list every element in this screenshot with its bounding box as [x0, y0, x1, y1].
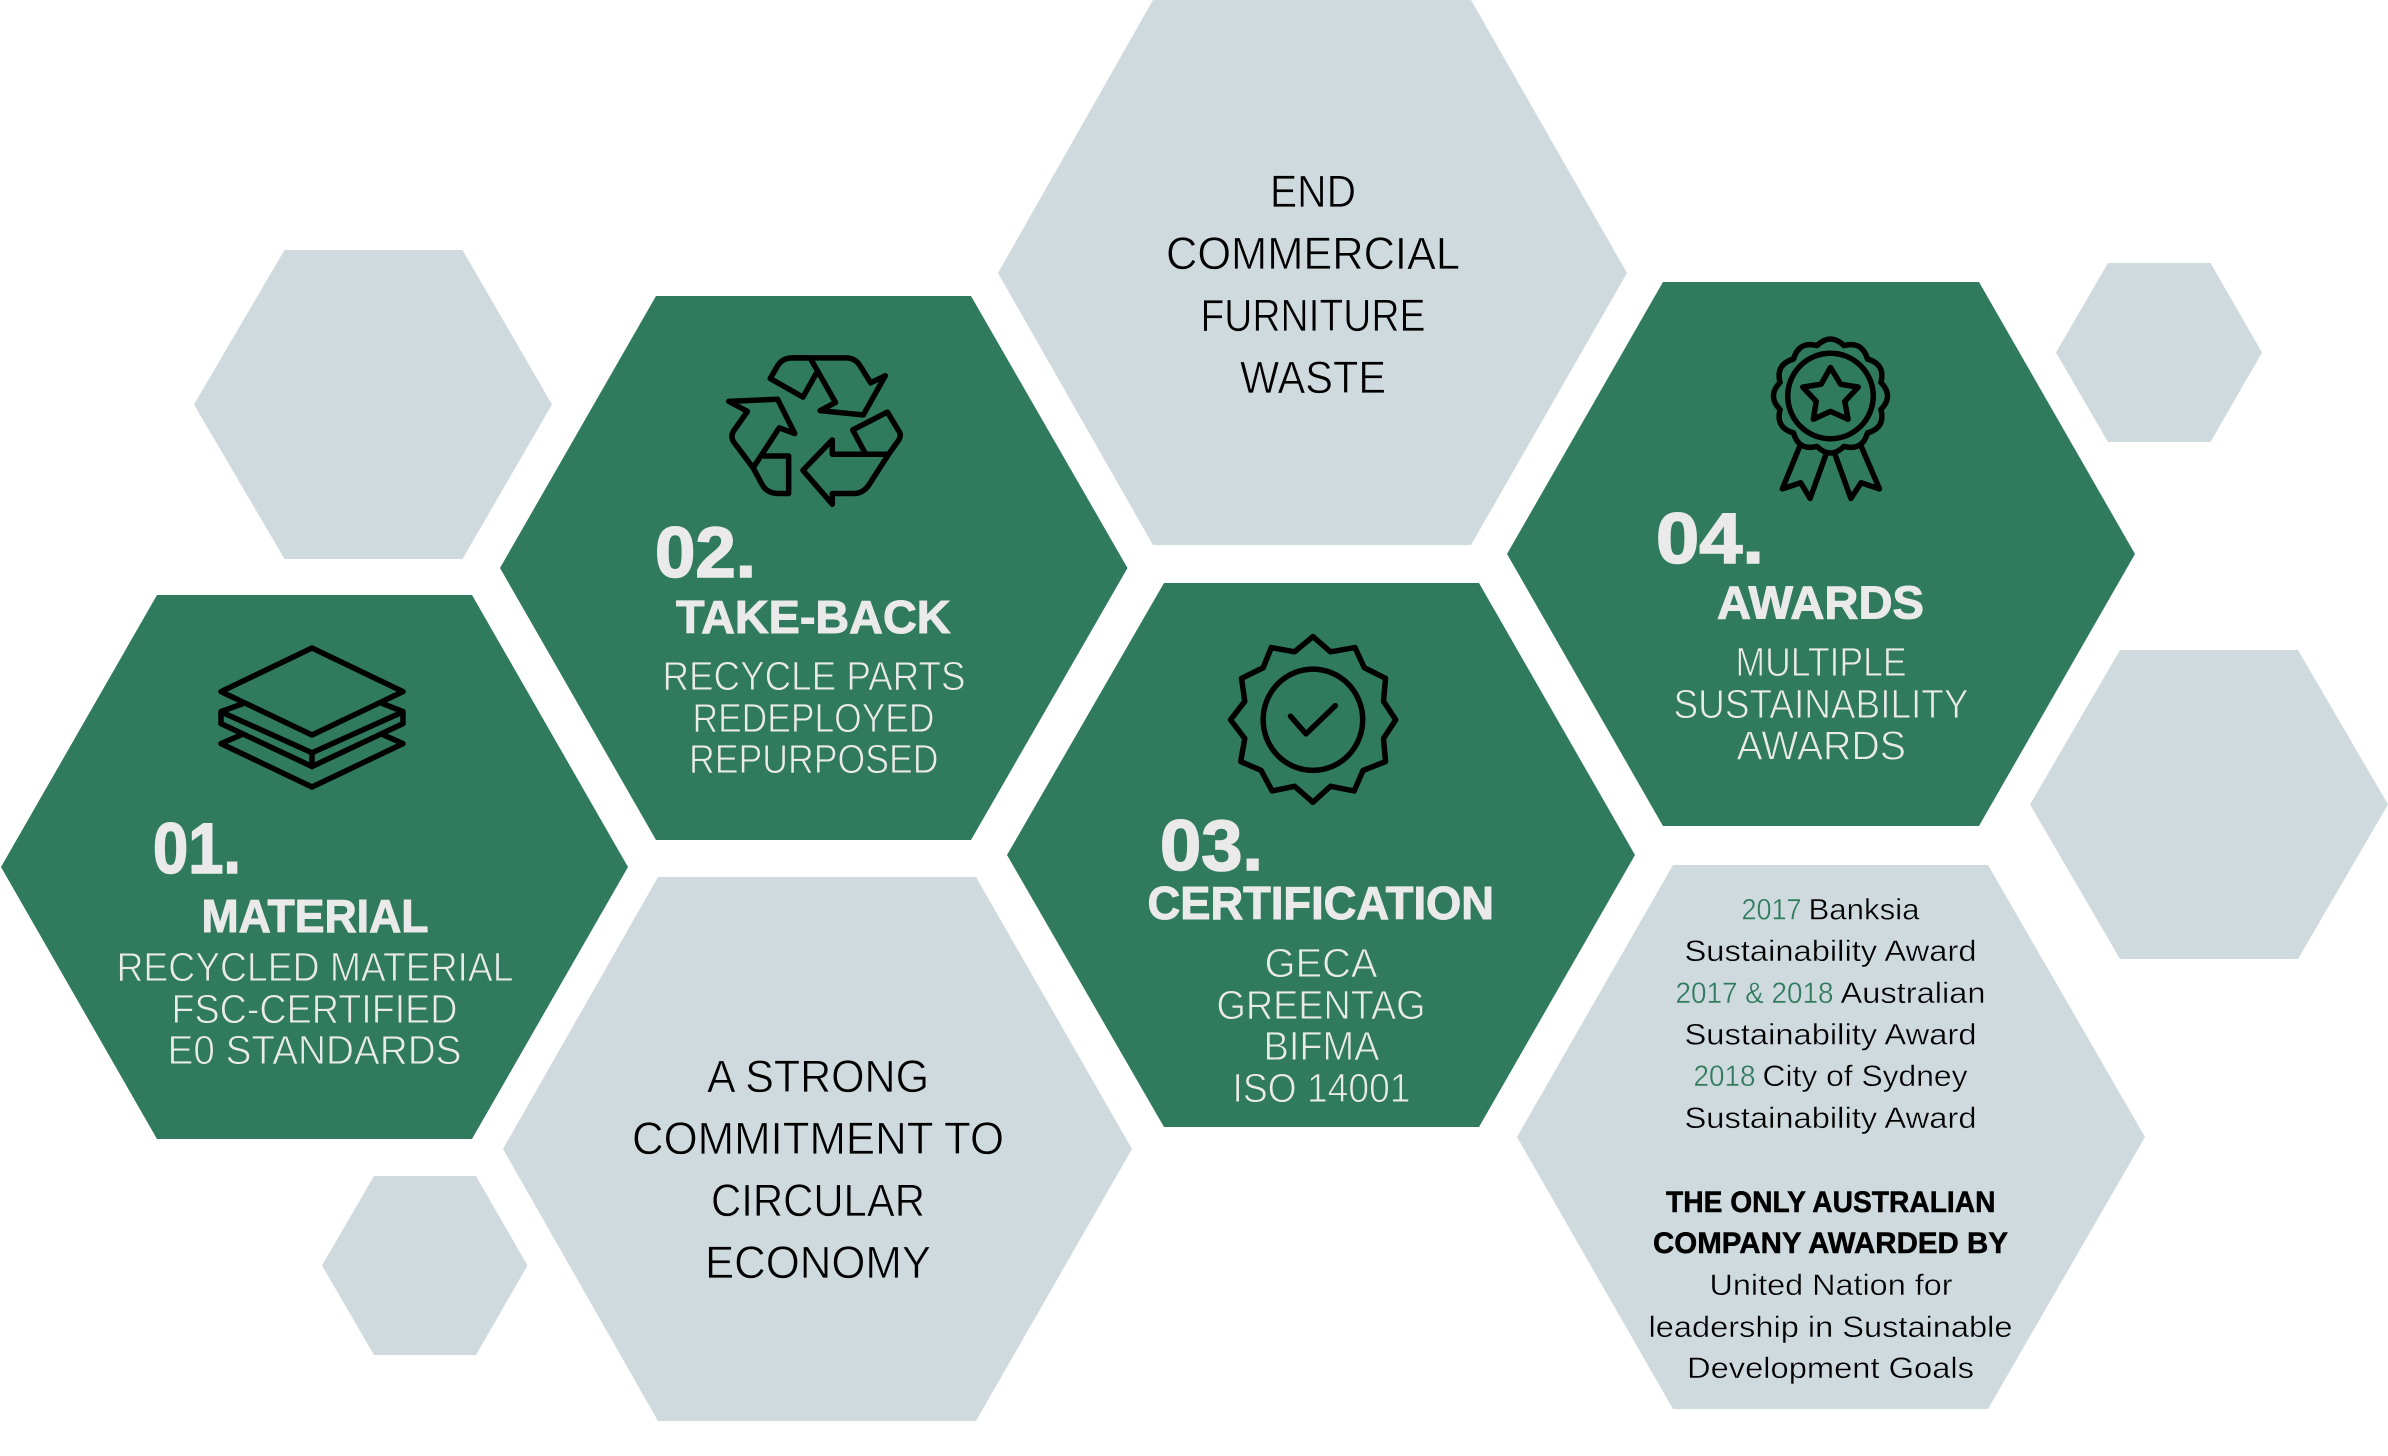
United Nations recognition text: COMPANY AWARDED BY — [1653, 1227, 2008, 1260]
number: 01. — [153, 810, 241, 889]
statement text: CIRCULAR — [711, 1175, 925, 1226]
details: REDEPLOYED — [692, 695, 934, 741]
statement text: WASTE — [1240, 352, 1386, 403]
panel: 04 awards — [1507, 282, 2135, 826]
details: REPURPOSED — [689, 736, 938, 782]
hexagon background — [500, 296, 1128, 840]
heading: CERTIFICATION — [1148, 877, 1494, 929]
decorative hexagon: right — [2030, 650, 2388, 959]
statement text: ECONOMY — [705, 1237, 931, 1288]
details: RECYCLED MATERIAL — [116, 944, 514, 990]
number: 02. — [655, 514, 756, 593]
United Nations recognition text: THE ONLY AUSTRALIAN — [1666, 1186, 1996, 1219]
details — [116, 944, 514, 1073]
award list text: Sustainability Award — [1684, 1019, 1976, 1052]
details: ISO 14001 — [1232, 1065, 1410, 1111]
details: FSC-CERTIFIED — [172, 986, 458, 1032]
panel: end commercial furniture waste — [998, 0, 1627, 545]
icon: layered sheets — [221, 648, 403, 787]
details: BIFMA — [1264, 1023, 1380, 1069]
award list text — [1676, 894, 1986, 1135]
details: SUSTAINABILITY — [1674, 681, 1968, 727]
United Nations recognition text — [1648, 1186, 2012, 1385]
panel: 02 take-back — [500, 296, 1128, 840]
decorative hexagon: upper right small — [2056, 263, 2262, 442]
United Nations recognition text: United Nation for — [1710, 1269, 1953, 1302]
statement text: END — [1270, 166, 1356, 217]
number: 03. — [1160, 807, 1263, 886]
decorative hexagon: upper left — [194, 250, 552, 559]
award list text: Sustainability Award — [1684, 1102, 1976, 1135]
details: GECA — [1264, 940, 1378, 986]
heading: AWARDS — [1717, 576, 1924, 628]
United Nations recognition text: Development Goals — [1687, 1352, 1974, 1385]
statement text: A STRONG — [707, 1051, 929, 1102]
hexagon background — [503, 877, 1132, 1421]
icon: award rosette — [1773, 339, 1888, 498]
statement text: COMMITMENT TO — [632, 1113, 1004, 1164]
details: E0 STANDARDS — [168, 1027, 462, 1073]
statement text: FURNITURE — [1200, 290, 1426, 341]
details — [1674, 639, 1968, 768]
details — [1216, 940, 1426, 1111]
heading: MATERIAL — [202, 890, 428, 942]
details: AWARDS — [1736, 722, 1906, 768]
panel: 01 material — [1, 595, 628, 1139]
award list text: Australian — [1840, 977, 1986, 1010]
award list text: Sustainability Award — [1684, 935, 1976, 968]
panel: 03 certification — [1007, 583, 1635, 1127]
statement text — [632, 1051, 1004, 1288]
icon: certified seal — [1231, 637, 1396, 802]
award list text: Banksia — [1808, 894, 1920, 927]
number: 04. — [1656, 500, 1764, 579]
award list text: 2017 — [1742, 894, 1802, 927]
hexagon background — [1507, 282, 2135, 826]
details: GREENTAG — [1216, 982, 1426, 1028]
panel: awards list — [1517, 865, 2145, 1409]
United Nations recognition text: leadership in Sustainable — [1648, 1311, 2012, 1344]
icon: recycling arrows — [729, 358, 900, 504]
award list text: City of Sydney — [1762, 1060, 1968, 1093]
heading: TAKE-BACK — [676, 591, 950, 643]
panel: circular economy commitment — [503, 877, 1132, 1421]
details: MULTIPLE — [1736, 639, 1906, 685]
hexagon background — [1, 595, 628, 1139]
award list text: 2018 — [1694, 1060, 1756, 1093]
details: RECYCLE PARTS — [662, 653, 966, 699]
hexagon background — [1007, 583, 1635, 1127]
decorative hexagon: lower left small — [322, 1176, 528, 1355]
statement text — [1166, 166, 1460, 403]
hexagon background — [1517, 865, 2145, 1409]
award list text: 2017 & 2018 — [1676, 977, 1834, 1010]
hexagon background — [998, 0, 1627, 545]
details — [662, 653, 966, 782]
statement text: COMMERCIAL — [1166, 228, 1460, 279]
